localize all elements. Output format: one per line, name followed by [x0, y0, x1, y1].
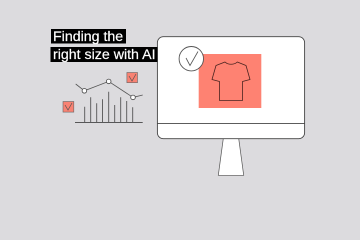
title: right size with AI — [53, 47, 156, 63]
icon: t-shirt — [212, 62, 250, 100]
bar and line chart — [75, 79, 143, 122]
icon: computer monitor — [157, 37, 305, 175]
monitor body — [157, 37, 305, 139]
monitor chin divider — [157, 122, 305, 124]
bars — [85, 92, 133, 122]
trend line — [76, 81, 143, 97]
salmon product panel — [199, 54, 261, 108]
icon: checked box right — [127, 72, 138, 83]
trend markers — [82, 88, 87, 93]
baseline — [75, 121, 143, 123]
title — [50, 29, 158, 63]
icon: checked box left — [63, 102, 74, 112]
icon: check circle — [179, 46, 204, 71]
monitor stand — [218, 138, 244, 175]
title: Finding the — [53, 29, 123, 45]
